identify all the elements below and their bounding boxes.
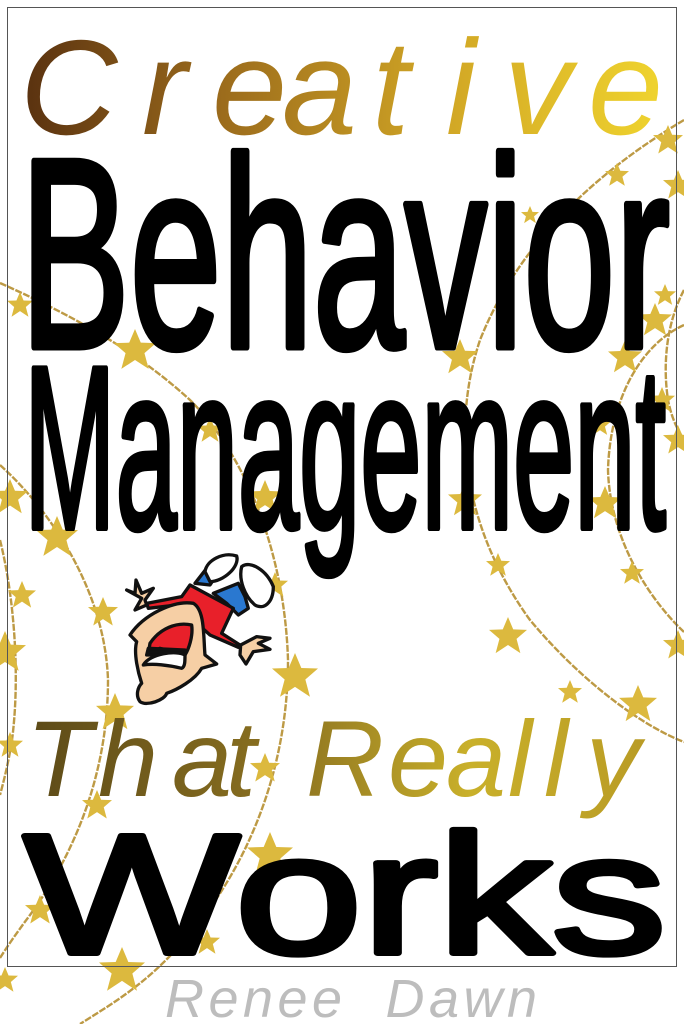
title: Creative: Creative [20, 12, 663, 163]
subtitle: That Really: That Really [26, 698, 646, 819]
title: Works: Works [24, 800, 666, 990]
icon: falling cartoon man [127, 555, 273, 703]
